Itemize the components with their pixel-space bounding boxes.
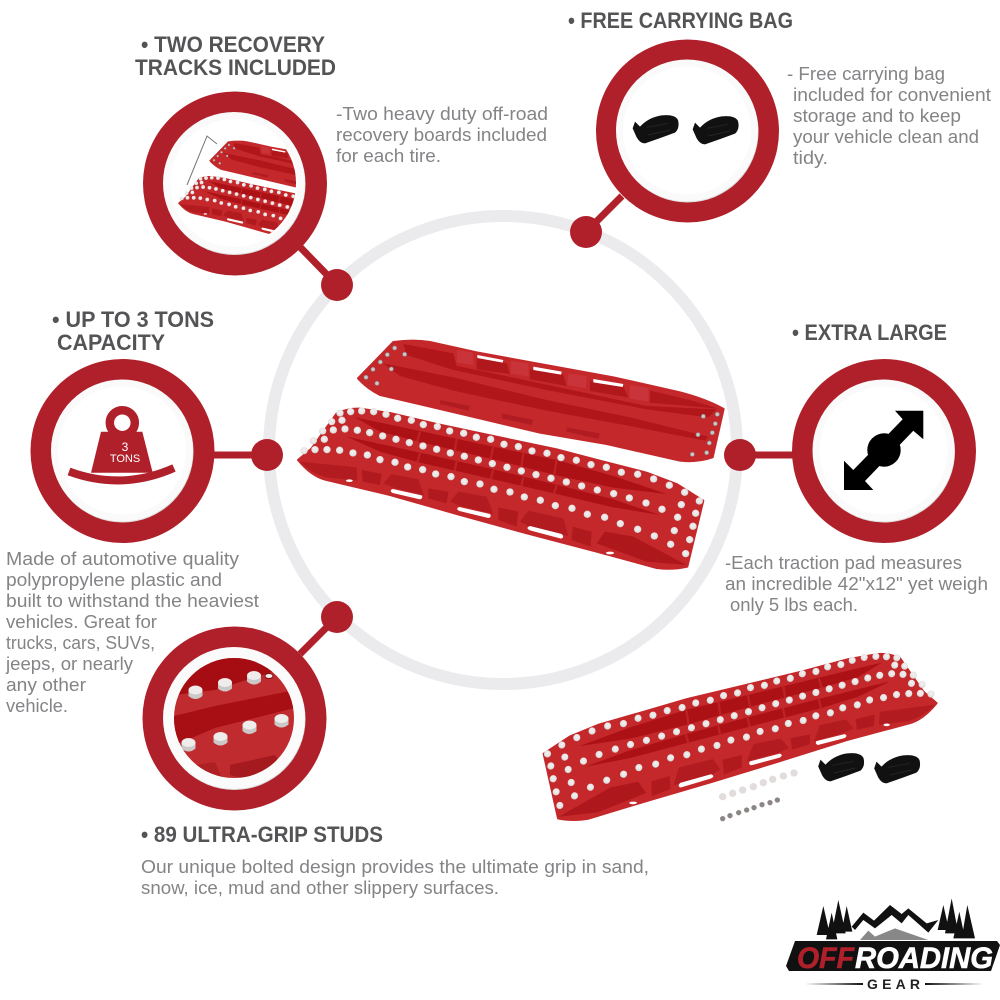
magnifier circle: two tracks	[143, 92, 327, 276]
text: free carrying bag: included for convenient	[793, 85, 991, 105]
magnifier circle: bag	[596, 40, 779, 222]
panel: ultra-grip studs	[141, 601, 649, 898]
heading: two recovery tracks: TRACKS INCLUDED	[135, 55, 336, 80]
heading: two recovery tracks: • TWO RECOVERY	[141, 32, 325, 57]
panel: central product image of two recovery boards	[298, 341, 724, 569]
panel: extra large	[724, 320, 988, 615]
logo subtitle: GEAR	[867, 976, 920, 992]
connector: studs	[300, 601, 353, 654]
text: studs description: snow, ice, mud and other slippery surfaces.	[141, 878, 499, 898]
heading: two recovery tracks	[135, 32, 336, 80]
panel: two recovery tracks	[135, 32, 548, 301]
panel: free carrying bag	[568, 8, 991, 248]
text: capacity description: polypropylene plastic and	[6, 570, 222, 590]
text: two recovery tracks: -Two heavy duty off-road	[336, 104, 548, 124]
connector: bag	[570, 196, 622, 248]
loose studs and bolts	[719, 769, 798, 821]
text: capacity description: Made of automotive quality	[6, 549, 239, 569]
icon: diagonal double arrow	[844, 411, 923, 490]
text: extra large	[725, 553, 988, 615]
heading: 89 ultra-grip studs: • 89 ULTRA-GRIP STUDS	[141, 822, 383, 847]
heading: up to 3 tons capacity	[52, 307, 214, 355]
connector: two tracks	[300, 247, 353, 301]
text: capacity description: vehicle.	[6, 696, 68, 716]
text: capacity description: trucks, cars, SUVs,	[6, 633, 155, 653]
heading: extra large: • EXTRA LARGE	[792, 320, 947, 345]
logo wordmark: ROADING	[855, 942, 993, 975]
logo badge	[786, 941, 1000, 971]
heading: free carrying bag: • FREE CARRYING BAG	[568, 8, 793, 33]
text: studs description	[141, 857, 649, 898]
text: extra large: -Each traction pad measures	[725, 553, 962, 573]
panel: bottom product kit image	[542, 651, 938, 821]
text: studs description: Our unique bolted design provides the ultimate grip in sand,	[141, 857, 649, 877]
logo wordmark	[797, 942, 993, 975]
icon: weight on curved scale	[69, 410, 174, 480]
icon: weight on curved scale: 3	[122, 440, 129, 454]
text: free carrying bag: your vehicle clean and	[793, 127, 979, 147]
text: extra large: only 5 lbs each.	[730, 595, 858, 615]
text: free carrying bag	[787, 64, 991, 168]
text: capacity description: any other	[6, 675, 86, 695]
text: capacity description: jeeps, or nearly	[5, 654, 133, 674]
text: two recovery tracks	[336, 104, 548, 166]
studs	[182, 671, 288, 752]
magnifier circle: extra large	[792, 359, 976, 543]
text: free carrying bag: - Free carrying bag	[787, 64, 945, 84]
magnifier circle: studs	[142, 626, 326, 810]
logo: Off Roading Gear	[786, 898, 1000, 992]
panel: up to 3 tons capacity	[5, 307, 283, 716]
magnifier circle: capacity	[30, 359, 214, 543]
text: free carrying bag: tidy.	[793, 148, 828, 168]
text: capacity description: vehicles. Great for	[6, 612, 157, 632]
connector: capacity	[212, 439, 283, 471]
text: capacity description: built to withstand the heaviest	[6, 591, 259, 611]
logo wordmark: OFF	[797, 942, 855, 975]
heading: up to 3 tons capacity: • UP TO 3 TONS	[52, 307, 214, 332]
heading: up to 3 tons capacity: CAPACITY	[57, 330, 165, 355]
icon: weight on curved scale: TONS	[110, 453, 140, 465]
logo artwork: trees and mountains	[817, 898, 975, 940]
text: capacity description	[5, 549, 259, 716]
board with studs	[542, 651, 938, 821]
text: extra large: an incredible 42"x12" yet weigh	[725, 574, 988, 594]
text: two recovery tracks: for each tire.	[336, 146, 441, 166]
text: two recovery tracks: recovery boards included	[336, 125, 547, 145]
connector: extra large	[724, 439, 796, 471]
large background ring	[269, 216, 737, 684]
straps	[818, 753, 920, 783]
text: free carrying bag: storage and to keep	[793, 106, 961, 126]
